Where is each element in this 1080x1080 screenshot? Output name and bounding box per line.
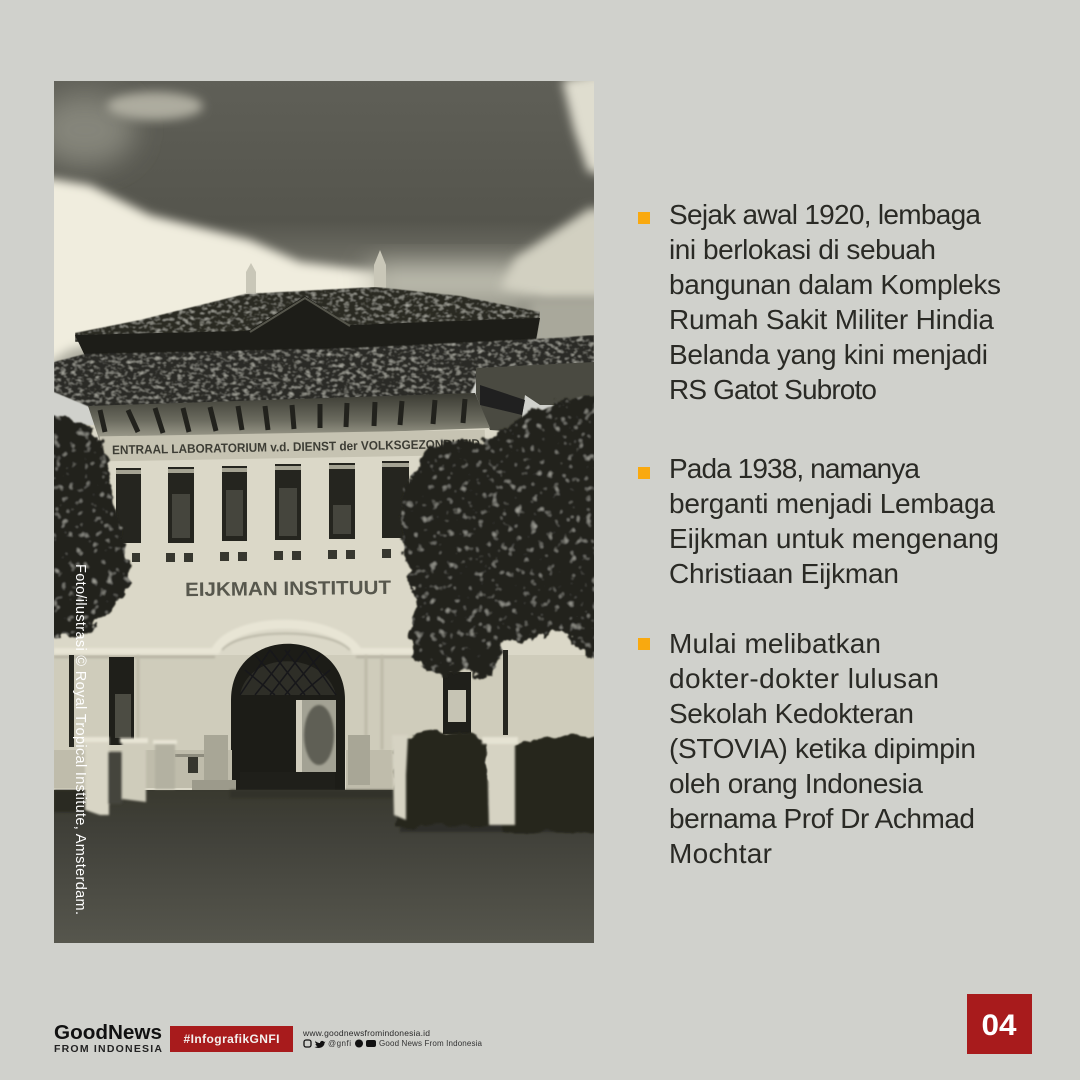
page name: Good News From Indonesia bbox=[379, 1039, 483, 1048]
plinth wall and steps bbox=[54, 735, 394, 790]
small vents bbox=[132, 549, 391, 562]
sky bbox=[54, 81, 594, 362]
hashtag badge bbox=[170, 1026, 293, 1052]
text 3 bbox=[669, 628, 976, 869]
right wing eave bbox=[476, 362, 594, 432]
icon: facebook bbox=[355, 1040, 363, 1048]
Eijkman Instituut lettering: EIJKMAN INSTITUUT bbox=[185, 577, 391, 601]
bullet 2 bbox=[638, 467, 650, 479]
cornice with brackets bbox=[88, 393, 490, 442]
photo: Eijkman Institute building bbox=[30, 70, 610, 943]
ground bbox=[54, 790, 594, 943]
hedges bbox=[396, 731, 600, 832]
icon: twitter bbox=[314, 1041, 326, 1048]
icon: instagram bbox=[304, 1040, 311, 1047]
hashtag badge: #InfografikGNFI bbox=[184, 1032, 280, 1046]
arched entrance bbox=[231, 644, 345, 792]
lower right window and downpipe bbox=[443, 650, 508, 735]
frieze inscription bbox=[100, 430, 485, 461]
bullet 3 bbox=[638, 638, 650, 650]
bullet 1 bbox=[638, 212, 650, 224]
logo: GoodNews From Indonesia: GoodNews bbox=[54, 1022, 162, 1044]
gate pillars bbox=[82, 737, 177, 815]
text 2: berganti menjadi Lembaga bbox=[669, 488, 995, 519]
text 1: ini berlokasi di sebuah bbox=[669, 234, 936, 265]
page number bbox=[967, 994, 1032, 1054]
text 1: Rumah Sakit Militer Hindia bbox=[669, 304, 994, 335]
bullet list bbox=[638, 199, 1001, 869]
text 2: Pada 1938, namanya bbox=[669, 453, 920, 484]
lower left windows and downpipe bbox=[69, 655, 134, 747]
text 3: Mochtar bbox=[669, 838, 772, 869]
text 3: Sekolah Kedokteran bbox=[669, 698, 914, 729]
lower roof bbox=[54, 335, 594, 407]
text 2: Christiaan Eijkman bbox=[669, 558, 899, 589]
text 3: dokter-dokter lulusan bbox=[669, 663, 939, 694]
text 3: (STOVIA) ketika dipimpin bbox=[669, 733, 976, 764]
text 1: RS Gatot Subroto bbox=[669, 374, 877, 405]
text 2: Eijkman untuk mengenang bbox=[669, 523, 999, 554]
point 3 bbox=[638, 628, 976, 869]
ground shadow bbox=[54, 790, 594, 832]
text 2 bbox=[669, 453, 999, 589]
roof finials bbox=[246, 250, 386, 293]
text 1 bbox=[669, 199, 1001, 405]
right pillars bbox=[392, 735, 518, 825]
right tree bbox=[402, 392, 610, 680]
text 3: bernama Prof Dr Achmad bbox=[669, 803, 975, 834]
frieze inscription: ENTRAAL LABORATORIUM v.d. DIENST der VOLKSGEZONDHEID bbox=[112, 437, 480, 457]
footer bbox=[54, 994, 1032, 1055]
page number: 04 bbox=[982, 1009, 1017, 1042]
ledge and arch moulding bbox=[54, 624, 440, 750]
handle: @gnfi bbox=[328, 1039, 351, 1048]
upper roof bbox=[75, 287, 540, 342]
logo: GoodNews From Indonesia bbox=[54, 1022, 162, 1055]
website and social handles: www.goodnewsfromindonesia.id bbox=[302, 1028, 430, 1038]
text 3: oleh orang Indonesia bbox=[669, 768, 923, 799]
icon: youtube bbox=[366, 1040, 376, 1047]
point 1 bbox=[638, 199, 1001, 405]
building wall bbox=[54, 425, 594, 795]
point 2 bbox=[638, 453, 999, 589]
text 1: Sejak awal 1920, lembaga bbox=[669, 199, 981, 230]
text 3: Mulai melibatkan bbox=[669, 628, 881, 659]
left tree bbox=[54, 414, 133, 640]
upper eave bbox=[75, 296, 540, 356]
website and social handles bbox=[302, 1028, 483, 1048]
photo credit: Foto/ilustrasi © Royal Tropical Institute, Amsterdam. bbox=[72, 564, 88, 915]
text 1: bangunan dalam Kompleks bbox=[669, 269, 1001, 300]
logo: GoodNews From Indonesia: FROM INDONESIA bbox=[54, 1043, 162, 1055]
upper windows bbox=[116, 461, 409, 543]
text 1: Belanda yang kini menjadi bbox=[669, 339, 988, 370]
